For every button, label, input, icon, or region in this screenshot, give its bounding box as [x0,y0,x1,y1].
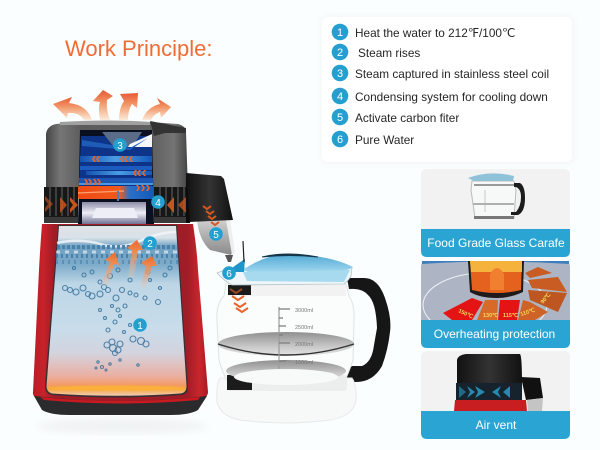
marker 3 [113,138,127,152]
marker 6 [222,266,236,280]
marker 2 [143,236,157,250]
marker 1: 1 [137,321,143,332]
step 3: Steam captured in stainless steel coil [355,67,549,81]
floor reflection [37,418,207,434]
marker 3: 3 [117,141,123,152]
panel: overheating protection card [421,261,570,348]
red body [33,224,208,402]
step 6: 6 [337,134,343,146]
handle [344,278,390,382]
rising steam arrows [101,252,119,286]
step 2: 2 [337,47,343,59]
water surfaces [218,332,354,356]
temperature segments [443,267,567,321]
step 2 [332,44,420,60]
step 5: Activate carbon fiter [355,111,459,125]
step 2: Steam rises [358,46,420,60]
measurement scale: 2500ml [295,325,313,331]
bottom ring [227,375,347,391]
drip arrows [230,289,248,312]
white base [217,378,356,423]
panel: air vent card [421,351,570,439]
step 5: 5 [337,112,343,124]
vent band [44,187,190,223]
upper housing [46,120,188,190]
step 1: Heat the water to 212℉/100℃ [355,26,515,40]
neck ring [228,285,346,296]
icon: machine top [454,354,543,411]
base [34,396,207,415]
icon: small carafe [468,173,525,219]
title: Work Principle: [65,36,213,61]
measurement scale: 1000ml [295,360,313,366]
temperature segments: 110℃ [519,306,537,318]
measurement scale: 2000ml [295,342,313,348]
step 6: Pure Water [355,133,414,147]
step 3: 3 [337,68,343,80]
panel: glass carafe [217,241,390,423]
marker 1 [133,318,147,332]
temperature segments: 90℃ [539,291,553,305]
lid [217,267,352,285]
panel: overheating protection card: Overheating protection [434,327,555,341]
measurement scale [279,307,313,369]
marker 5: 5 [213,230,219,241]
water window [45,225,188,398]
icon: steam arrows [53,90,171,120]
step 4: Condensing system for cooling down [355,90,548,104]
marker 4: 4 [155,198,161,209]
temperature segments: 130℃ [483,312,499,319]
condenser coil window [78,130,154,224]
panel: steps legend [322,17,573,163]
panel: air vent card: Air vent [476,418,517,432]
marker 4 [151,195,165,209]
panel: carbon filter [186,173,235,262]
panel: distiller [33,120,208,415]
bubbles [56,232,178,371]
panel: food grade glass carafe card [421,169,570,257]
marker 6: 6 [226,269,232,280]
markers on the machine [113,138,236,332]
temperature segments: 115℃ [503,312,519,319]
marker 5 [209,227,223,241]
step 6 [332,131,414,147]
glass body [217,284,354,382]
temperature segments: 150℃ [457,307,475,321]
panel: food grade glass carafe card: Food Grade Glass Carafe [427,236,565,250]
marker 2: 2 [147,239,153,250]
step 5 [332,109,459,125]
icon: heated kettle [468,261,524,298]
step 1: 1 [337,27,343,39]
measurement scale: 3000ml [295,308,313,314]
step 4: 4 [337,91,343,103]
